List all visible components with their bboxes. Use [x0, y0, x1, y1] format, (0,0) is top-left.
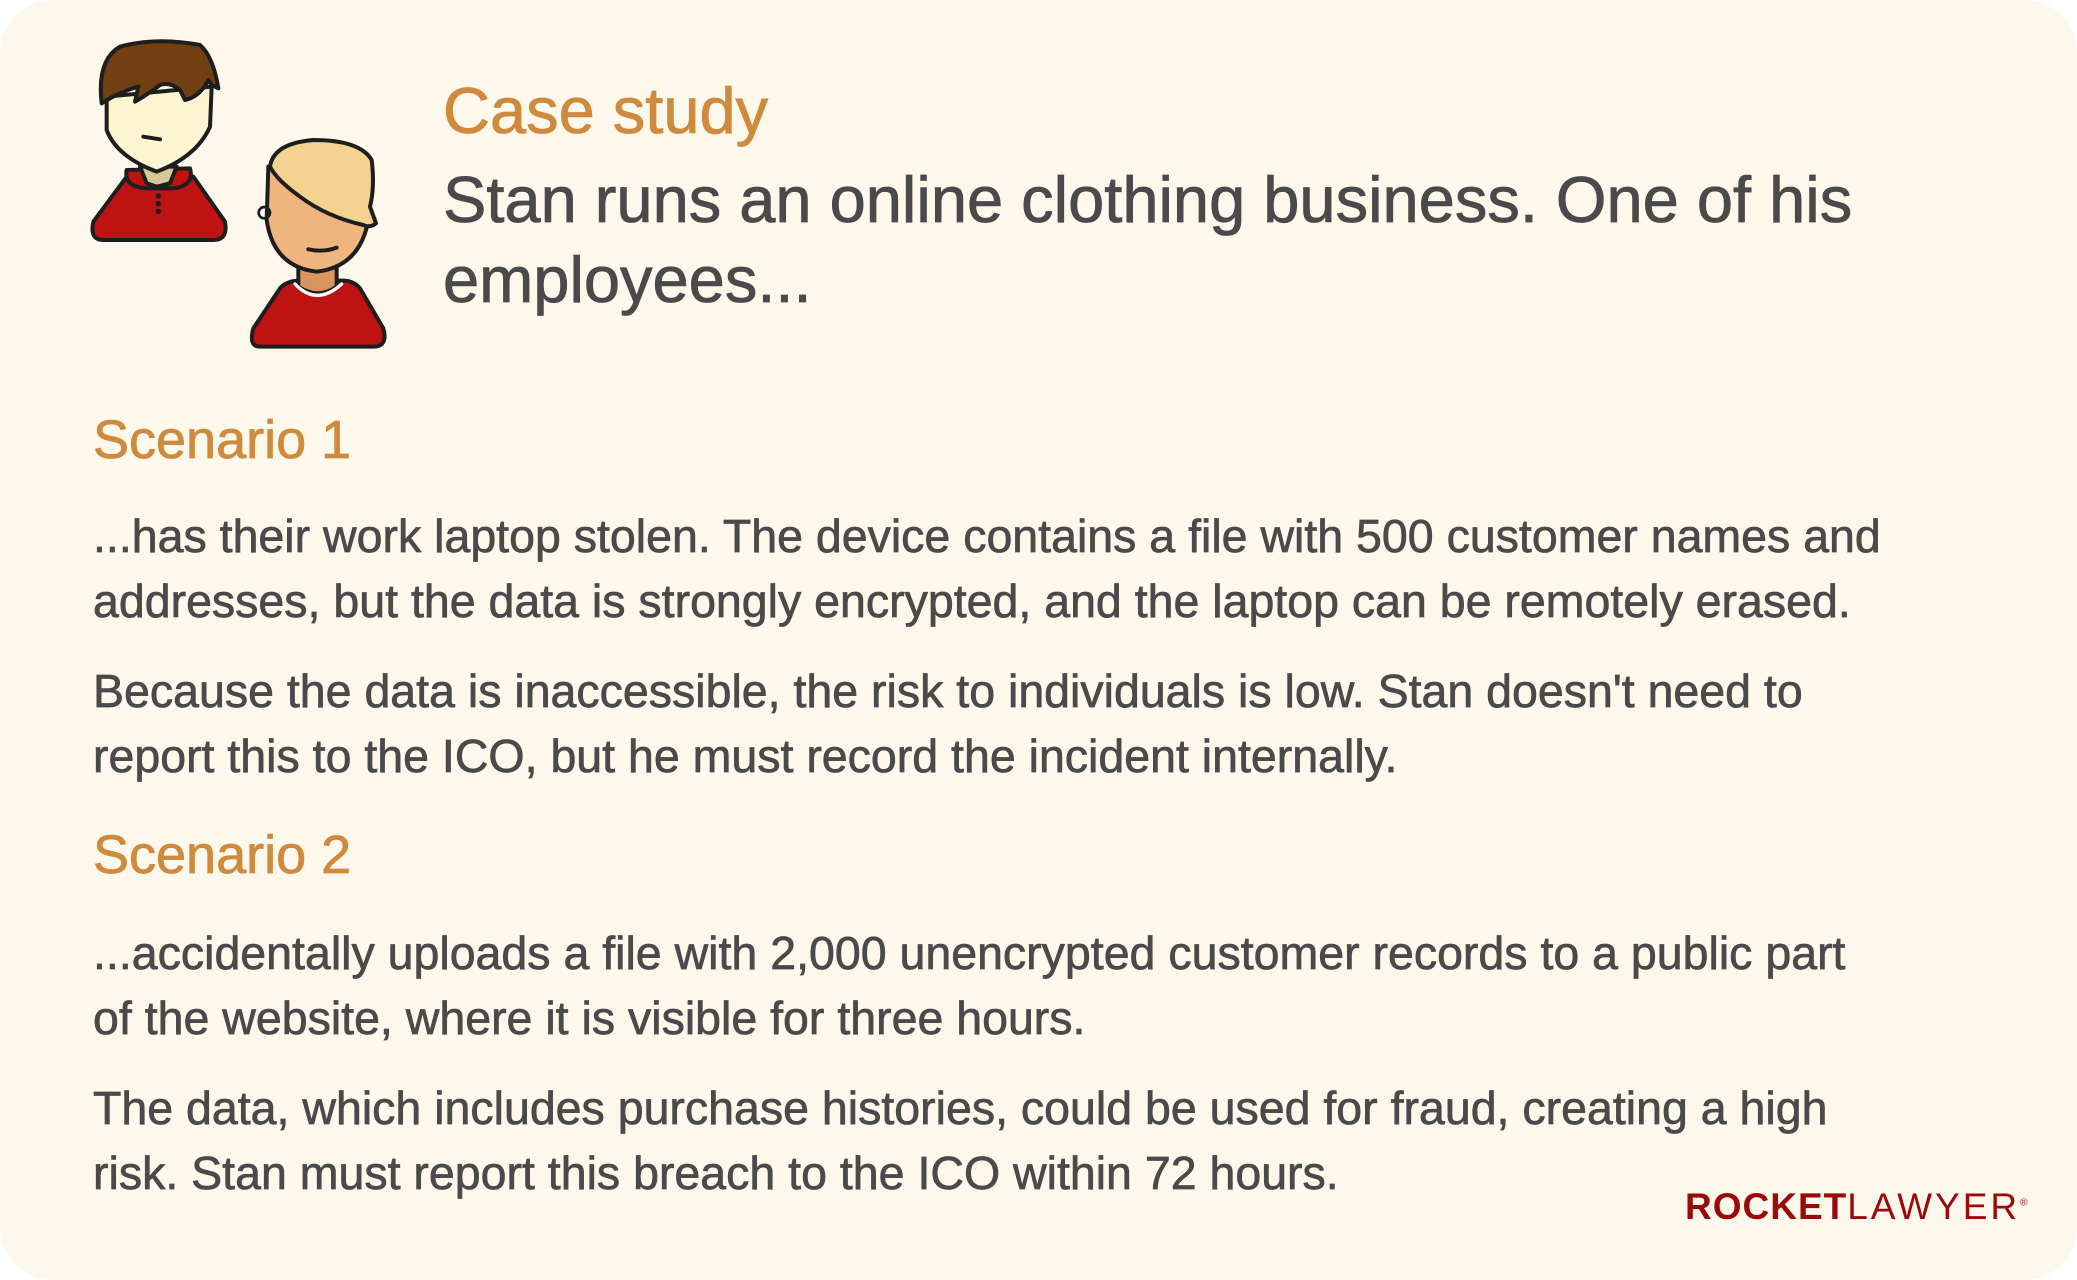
text: scenario 2 description: of the website, where it is visible for three hours. [93, 992, 1085, 1044]
text: scenario 1 outcome: Because the data is inaccessible, the risk to individuals is low. Stan doesn't need to [93, 665, 1803, 717]
subtitle [443, 163, 1852, 316]
man body [92, 177, 226, 240]
text: scenario 1 description: addresses, but the data is strongly encrypted, and the laptop can be remotely erased. [93, 575, 1851, 627]
subtitle: Stan runs an online clothing business. One of his [443, 163, 1852, 236]
text: scenario 2 outcome [93, 1082, 1827, 1199]
text: scenario 2 outcome: The data, which includes purchase histories, could be used for fraud, creating a high [93, 1082, 1827, 1134]
icon: two people [90, 39, 387, 349]
heading: scenario 2: Scenario 2 [93, 825, 351, 885]
text: scenario 2 description [93, 927, 1846, 1044]
man head [107, 87, 212, 172]
text: scenario 1 outcome: report this to the ICO, but he must record the incident internally. [93, 730, 1397, 782]
text: scenario 2 description: ...accidentally uploads a file with 2,000 unencrypted customer records to a public part [93, 927, 1845, 979]
text: scenario 1 outcome [93, 665, 1803, 782]
heading: scenario 1: Scenario 1 [93, 410, 351, 470]
text: scenario 1 description: ...has their work laptop stolen. The device contains a file with 500 customer names and [93, 510, 1881, 562]
heading: case study: Case study [443, 74, 768, 147]
subtitle: employees... [443, 243, 812, 316]
woman head [267, 167, 370, 272]
woman body [252, 281, 385, 347]
text: scenario 2 outcome: risk. Stan must report this breach to the ICO within 72 hours. [93, 1147, 1339, 1199]
logo: rocket lawyer: ROCKETLAWYER® [1685, 1186, 2028, 1227]
text: scenario 1 description [93, 510, 1881, 627]
